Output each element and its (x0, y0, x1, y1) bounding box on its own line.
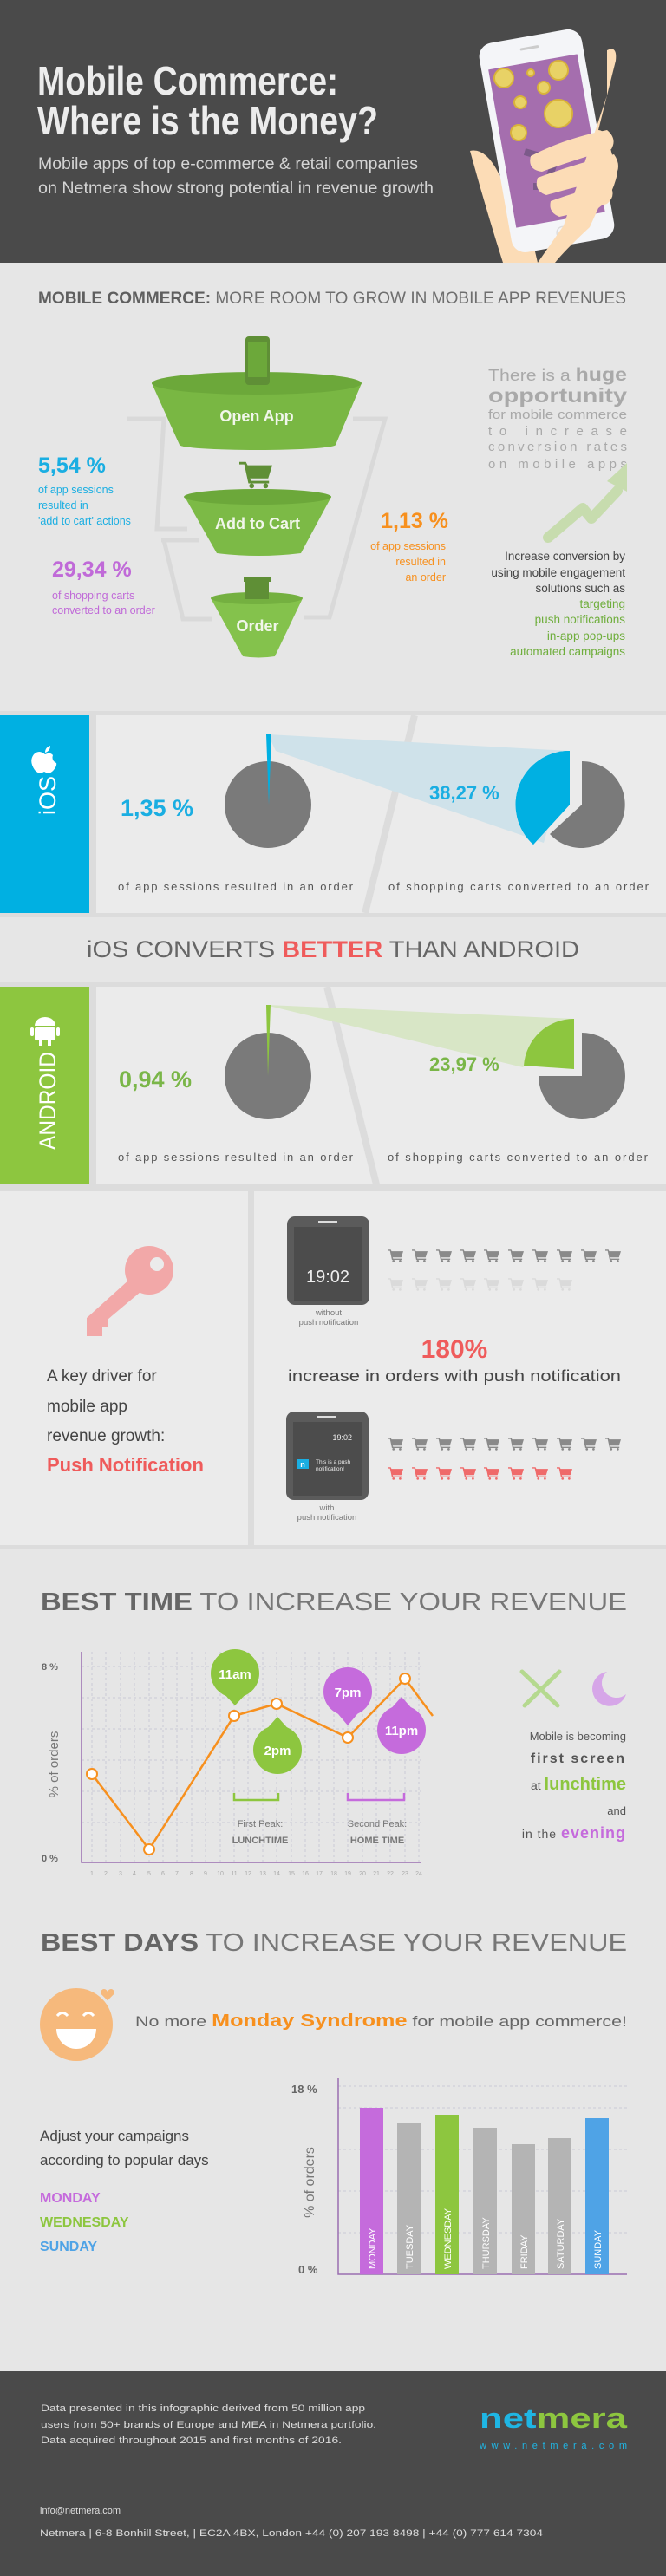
icon: key (87, 1246, 173, 1336)
icon: phone with push: notification! (316, 1466, 344, 1472)
funnel: add to cart: Add to Cart (215, 515, 300, 532)
footer: Netmera | 6-8 Bonhill Street, | EC2A 4BX, London +44 (0) 207 193 8498 | +44 (0) 777 614 7304 (40, 2528, 543, 2539)
line chart: orders by hour: 19 (344, 1871, 351, 1877)
text: huge opportunity: on mobile apps (488, 457, 627, 472)
stat: 5,54%: of app sessions (38, 484, 114, 496)
panel: iOS: 38,27 % (429, 782, 500, 804)
subtitle: Mobile apps of top e-commerce & retail companies (38, 155, 418, 173)
heading: mobile commerce: MOBILE COMMERCE: MORE ROOM TO GROW IN MOBILE APP REVENUES (38, 290, 626, 308)
bar chart: orders by day: SATURDAY (556, 2218, 566, 2269)
text: popular days: MONDAY (40, 2191, 101, 2206)
funnel: open app (152, 336, 362, 450)
panel: push notification right (254, 1191, 666, 1545)
line chart: orders by hour: 13 (259, 1871, 266, 1877)
peak labels: Second Peak: (348, 1819, 407, 1829)
text: increase conversion: Increase conversion by (505, 550, 625, 563)
line chart: orders by hour: 15 (288, 1871, 295, 1877)
subtitle (38, 155, 434, 198)
footer: Data acquired throughout 2015 and first months of 2016. (41, 2436, 342, 2446)
funnel: open app: Open App (219, 408, 294, 425)
text: first screen: first screen (531, 1751, 626, 1766)
panel: iOS: 1,35 % (121, 795, 193, 821)
logo: netmera: www.netmera.com (479, 2441, 627, 2451)
bubble: 11am (211, 1649, 259, 1705)
bar chart: orders by day: 0 % (298, 2263, 318, 2276)
panel: Android: 0,94 % (119, 1066, 192, 1092)
line chart: orders by hour: 8 (190, 1871, 193, 1877)
line chart: orders by hour: 20 (359, 1871, 366, 1877)
icon: phone with push: n (300, 1460, 305, 1469)
panel: push notification right: push notification (299, 1318, 358, 1327)
pie: android sessions (225, 1005, 574, 1119)
text: huge opportunity: conversion rates (488, 440, 627, 454)
line chart: orders by hour (42, 1649, 433, 1877)
title: Mobile Commerce: (37, 58, 338, 103)
funnel: order: Order (236, 617, 279, 635)
line chart: orders by hour: 16 (302, 1871, 309, 1877)
bar chart: orders by day: THURSDAY (481, 2217, 492, 2269)
line chart: orders by hour: 11 (231, 1871, 238, 1877)
pie: iOS sessions (225, 734, 570, 848)
subtitle: on Netmera show strong potential in revenue growth (38, 179, 434, 198)
text: increase conversion: using mobile engagement (491, 566, 625, 579)
icon: phone with push: This is a push (316, 1459, 350, 1465)
text: first screen (522, 1730, 626, 1842)
text: first screen: at lunchtime (531, 1775, 626, 1794)
bar chart: orders by day: WEDNESDAY (443, 2208, 454, 2269)
funnel brackets (127, 419, 385, 619)
footer: info@netmera.com (40, 2506, 121, 2516)
panel: push notification right: without (315, 1308, 342, 1318)
icon: phone (245, 336, 270, 385)
title (37, 58, 378, 143)
panel: Android: 23,97 % (429, 1053, 500, 1075)
stat: 5,54%: 5,54 % (38, 453, 106, 478)
bubble: 2pm: 2pm (264, 1744, 291, 1758)
stat: 1,13%: of app sessions (370, 540, 446, 552)
callout: monday syndrome: No more Monday Syndrome for mobile app commerce! (135, 2012, 627, 2031)
bubble: 11pm (377, 1697, 426, 1754)
panel: iOS: of shopping carts converted to an order (388, 880, 650, 893)
panel: push notification right: push notification (297, 1513, 356, 1523)
stat: 29,34% (52, 558, 155, 616)
stat: 5,54% (38, 453, 131, 527)
text: key driver: revenue growth: (47, 1427, 165, 1445)
panel: push notification right: with (319, 1503, 334, 1513)
heading: best days: BEST DAYS TO INCREASE YOUR REVENUE (41, 1929, 627, 1957)
header band (0, 0, 666, 263)
icon: smiley (40, 1988, 114, 2061)
text: huge opportunity (488, 365, 627, 472)
line chart: orders by hour: 10 (217, 1871, 224, 1877)
line chart: orders by hour: 17 (316, 1871, 323, 1877)
text: increase conversion: solutions such as (535, 582, 625, 595)
stat: 29,34%: of shopping carts (52, 590, 134, 602)
peak labels: First Peak: (238, 1819, 283, 1829)
stat: 1,13%: 1,13 % (381, 509, 448, 533)
bar chart: orders by day: % of orders (303, 2147, 317, 2218)
line chart: orders by hour: 8 % (42, 1662, 58, 1673)
bubble: 11pm: 11pm (385, 1724, 418, 1738)
line chart: orders by hour: 6 (161, 1871, 165, 1877)
stat: 1,13%: resulted in (395, 556, 446, 568)
bar chart: orders by day: 18 % (291, 2083, 317, 2096)
carts row with push (388, 1438, 621, 1451)
text: huge opportunity: for mobile commerce (488, 408, 627, 422)
stat: 29,34%: converted to an order (52, 604, 155, 616)
peak labels (232, 1793, 407, 1846)
line chart: orders by hour: 22 (387, 1871, 394, 1877)
line chart: orders by hour: 24 (415, 1871, 422, 1877)
panel: Android: of app sessions resulted in an order (118, 1151, 354, 1164)
text: increase conversion: push notifications (535, 613, 625, 626)
stat: 5,54%: 'add to cart' actions (38, 515, 131, 527)
text: key driver (47, 1367, 204, 1476)
text: key driver: mobile app (47, 1398, 127, 1416)
stat: 29,34%: 29,34 % (52, 558, 132, 582)
icon: gift (244, 577, 271, 599)
panel: push notification right: increase in orders with push notification (288, 1367, 621, 1385)
icon: phone without push (287, 1216, 369, 1305)
panel: push notification left (0, 1184, 666, 1549)
panel: Android (0, 982, 666, 1191)
bar chart: orders by day: SUNDAY (593, 2229, 604, 2269)
peak labels: LUNCHTIME (232, 1836, 288, 1846)
text: huge opportunity: There is a huge (488, 365, 627, 385)
line chart: orders by hour: 14 (273, 1871, 280, 1877)
line chart: orders by hour: % of orders (47, 1731, 62, 1797)
pie: android carts (524, 1019, 625, 1119)
stat: 1,13%: an order (405, 571, 446, 584)
stat: 1,13% (370, 509, 448, 584)
bubble: 2pm (253, 1717, 302, 1774)
bubble: 7pm: 7pm (335, 1686, 361, 1700)
bubble: 7pm (323, 1667, 372, 1725)
carts row without push (388, 1249, 621, 1262)
icon: moon (592, 1672, 626, 1706)
panel: iOS (0, 711, 666, 917)
footer: users from 50+ brands of Europe and MEA in Netmera portfolio. (41, 2420, 376, 2430)
text: huge opportunity: opportunity (488, 384, 627, 407)
text: popular days: according to popular days (40, 2152, 209, 2168)
icon: growth arrow (548, 463, 627, 538)
logo: netmera (479, 2403, 627, 2451)
logo: netmera: net mera (480, 2403, 627, 2434)
title: Where is the Money? (37, 98, 378, 143)
text: increase conversion: in-app pop-ups (547, 629, 625, 642)
panel: iOS: iOS (35, 776, 61, 815)
bubble: 11am: 11am (219, 1667, 251, 1682)
heading: best time: BEST TIME TO INCREASE YOUR REVENUE (41, 1588, 627, 1616)
text: first screen: and (607, 1804, 626, 1817)
line chart: orders by hour: 23 (402, 1871, 408, 1877)
line chart: orders by hour: 4 (133, 1871, 136, 1877)
bar chart: orders by day: MONDAY (368, 2227, 378, 2269)
line chart: orders by hour: 2 (104, 1871, 108, 1877)
line chart: orders by hour: 12 (245, 1871, 251, 1877)
heading: iOS converts better: iOS CONVERTS BETTER THAN ANDROID (87, 936, 579, 962)
text: huge opportunity: to increase (488, 424, 627, 439)
icon: phone with push: 19:02 (332, 1433, 352, 1442)
peak labels: HOME TIME (350, 1836, 404, 1846)
text: first screen: in the evening (522, 1824, 626, 1842)
text: popular days: Adjust your campaigns (40, 2128, 189, 2144)
bar chart: orders by day (291, 2078, 627, 2276)
stat: 180%: 180% (421, 1335, 487, 1364)
icon: phone with push (286, 1412, 369, 1500)
line chart: orders by hour: 3 (119, 1871, 122, 1877)
line chart: orders by hour: 18 (330, 1871, 337, 1877)
text: popular days: WEDNESDAY (40, 2215, 129, 2230)
line chart: orders by hour: 21 (373, 1871, 380, 1877)
funnel: order (211, 577, 303, 657)
text: popular days: SUNDAY (40, 2240, 97, 2254)
text: increase conversion: automated campaigns (510, 645, 625, 658)
text: key driver: A key driver for (47, 1367, 157, 1386)
line chart: orders by hour: 7 (175, 1871, 179, 1877)
panel: Android: of shopping carts converted to an order (388, 1151, 649, 1164)
icon: apple (31, 746, 56, 773)
funnel: add to cart (184, 462, 331, 556)
line chart: orders by hour: 9 (204, 1871, 207, 1877)
panel: Android: ANDROID (35, 1052, 61, 1150)
panel: iOS: of app sessions resulted in an order (118, 880, 354, 893)
icon: android robot (30, 1017, 60, 1046)
bar chart: orders by day: FRIDAY (519, 2234, 530, 2269)
line chart: orders by hour: 1 (90, 1871, 94, 1877)
icon: fork and spoon (522, 1672, 559, 1705)
line chart: orders by hour: 0 % (42, 1854, 58, 1864)
bar chart: orders by day: TUESDAY (405, 2224, 415, 2269)
icon: cart (239, 462, 272, 488)
text: key driver: Push Notification (47, 1454, 204, 1476)
text: first screen: Mobile is becoming (530, 1730, 626, 1743)
text: increase conversion (491, 550, 625, 658)
illustration: hand holding phone (470, 27, 618, 263)
footer: Data presented in this infographic derived from 50 million app (41, 2403, 365, 2414)
pie: iOS carts (516, 751, 625, 848)
text: popular days (40, 2128, 209, 2254)
text: increase conversion: targeting (579, 597, 625, 610)
stat: 5,54%: resulted in (38, 499, 88, 512)
icon: phone without push: 19:02 (306, 1268, 349, 1287)
footer (0, 2371, 666, 2576)
line chart: orders by hour: 5 (147, 1871, 151, 1877)
